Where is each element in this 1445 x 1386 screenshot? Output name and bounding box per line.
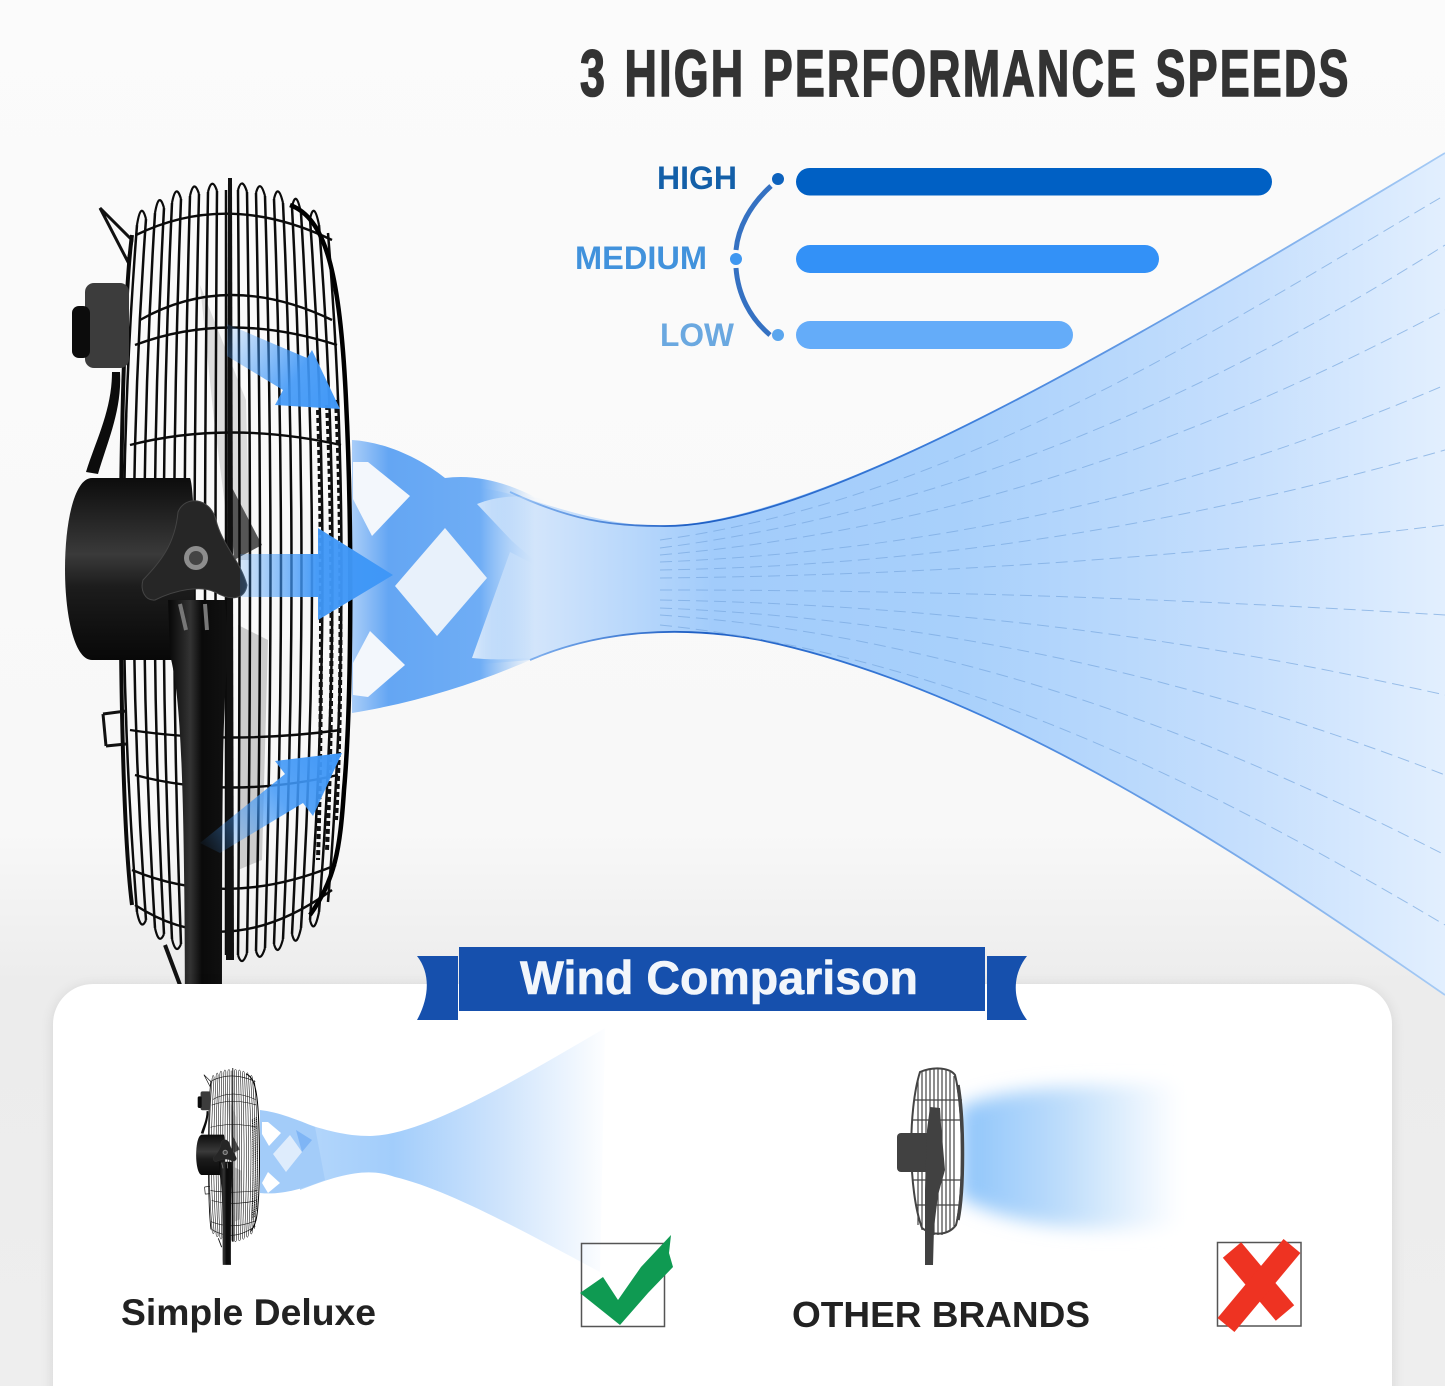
label: high: HIGH <box>657 160 737 196</box>
airflow cone <box>470 153 1445 995</box>
twisted airflow ribbon <box>352 440 545 713</box>
bar: high <box>796 168 1272 196</box>
other brands airflow <box>960 1085 1180 1229</box>
bracket arc with dots <box>730 173 784 341</box>
small fan: other brands <box>897 1068 962 1265</box>
label: medium: MEDIUM <box>575 240 707 276</box>
arrow: middle <box>240 528 393 620</box>
card shadow <box>53 986 1392 1386</box>
banner: wind comparison: Wind Comparison <box>520 951 918 1004</box>
label: simple deluxe: Simple Deluxe <box>121 1292 376 1333</box>
panel: wind comparison card <box>53 984 1392 1386</box>
check box <box>580 1235 673 1326</box>
fan <box>65 178 350 1065</box>
small fan: simple deluxe <box>196 1068 259 1265</box>
cross box <box>1218 1242 1301 1326</box>
label: other brands: OTHER BRANDS <box>792 1294 1090 1335</box>
bar: medium <box>796 245 1159 273</box>
speed chart <box>575 160 1272 353</box>
title: 3 HIGH PERFORMANCE SPEEDS <box>580 36 1351 110</box>
arrow: lower <box>200 753 342 853</box>
label: low: LOW <box>660 317 735 353</box>
simple deluxe airflow <box>260 1028 605 1272</box>
bar: low <box>796 321 1073 349</box>
banner: wind comparison <box>417 947 1027 1020</box>
arrow: upper <box>227 324 340 409</box>
